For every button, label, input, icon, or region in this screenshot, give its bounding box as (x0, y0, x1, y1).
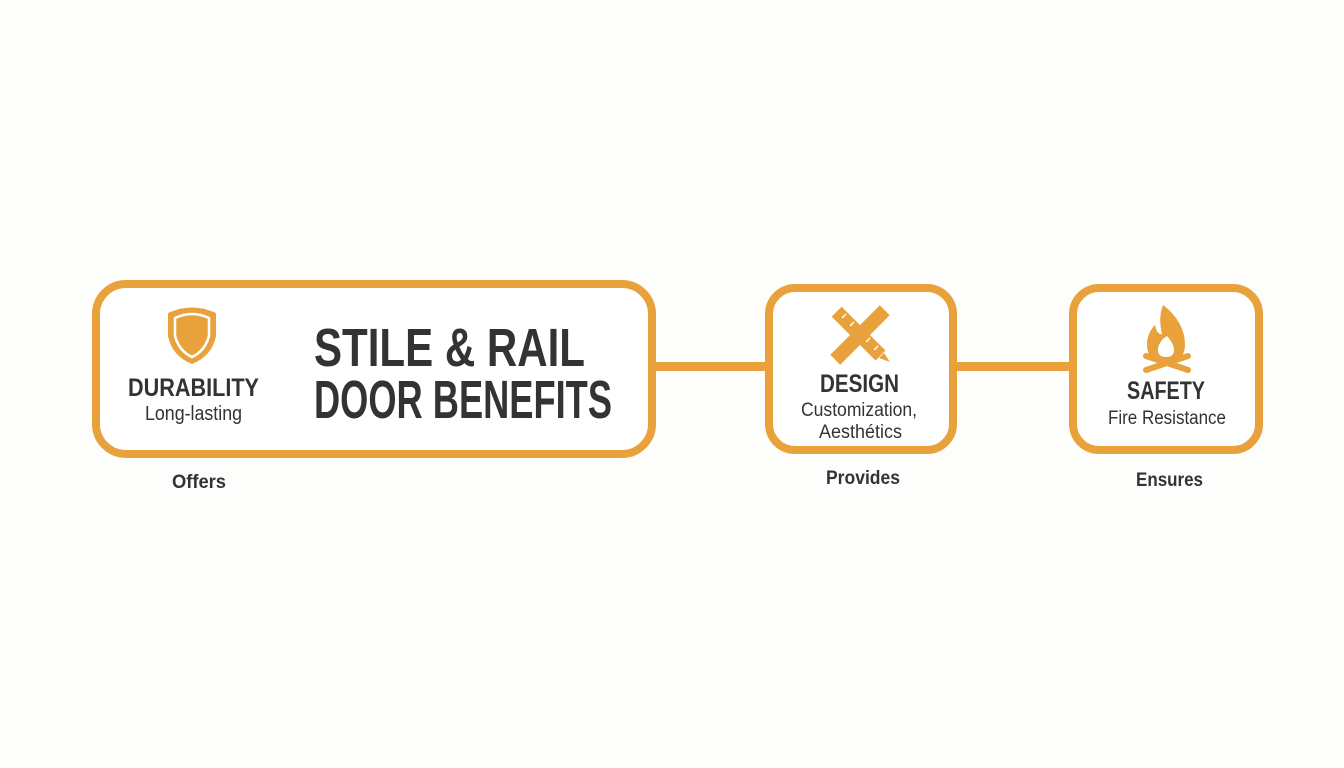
text: customization: Customization, (801, 400, 917, 421)
connector: main to design (652, 362, 768, 371)
label: offers: Offers (172, 472, 226, 493)
panel: main title box (96, 284, 652, 454)
panel: safety (1073, 288, 1259, 450)
text: long-lasting: Long-lasting (145, 403, 242, 425)
connector: design to safety (953, 362, 1073, 371)
icon: shield (168, 308, 216, 364)
text: customization (801, 400, 917, 443)
heading: durability: DURABILITY (128, 374, 259, 402)
title: STILE & RAIL (314, 318, 585, 378)
label: provides: Provides (826, 468, 900, 489)
icon: ruler and pencil (830, 305, 890, 365)
icon: fire (1146, 305, 1188, 370)
panel: design (769, 288, 953, 450)
text: fire resistance: Fire Resistance (1108, 408, 1226, 429)
title: DOOR BENEFITS (314, 370, 612, 430)
title (314, 318, 612, 430)
heading: design: DESIGN (820, 370, 899, 398)
heading: safety: SAFETY (1127, 377, 1205, 405)
text: customization: Aesthétics (819, 422, 902, 443)
label: ensures: Ensures (1136, 470, 1203, 491)
